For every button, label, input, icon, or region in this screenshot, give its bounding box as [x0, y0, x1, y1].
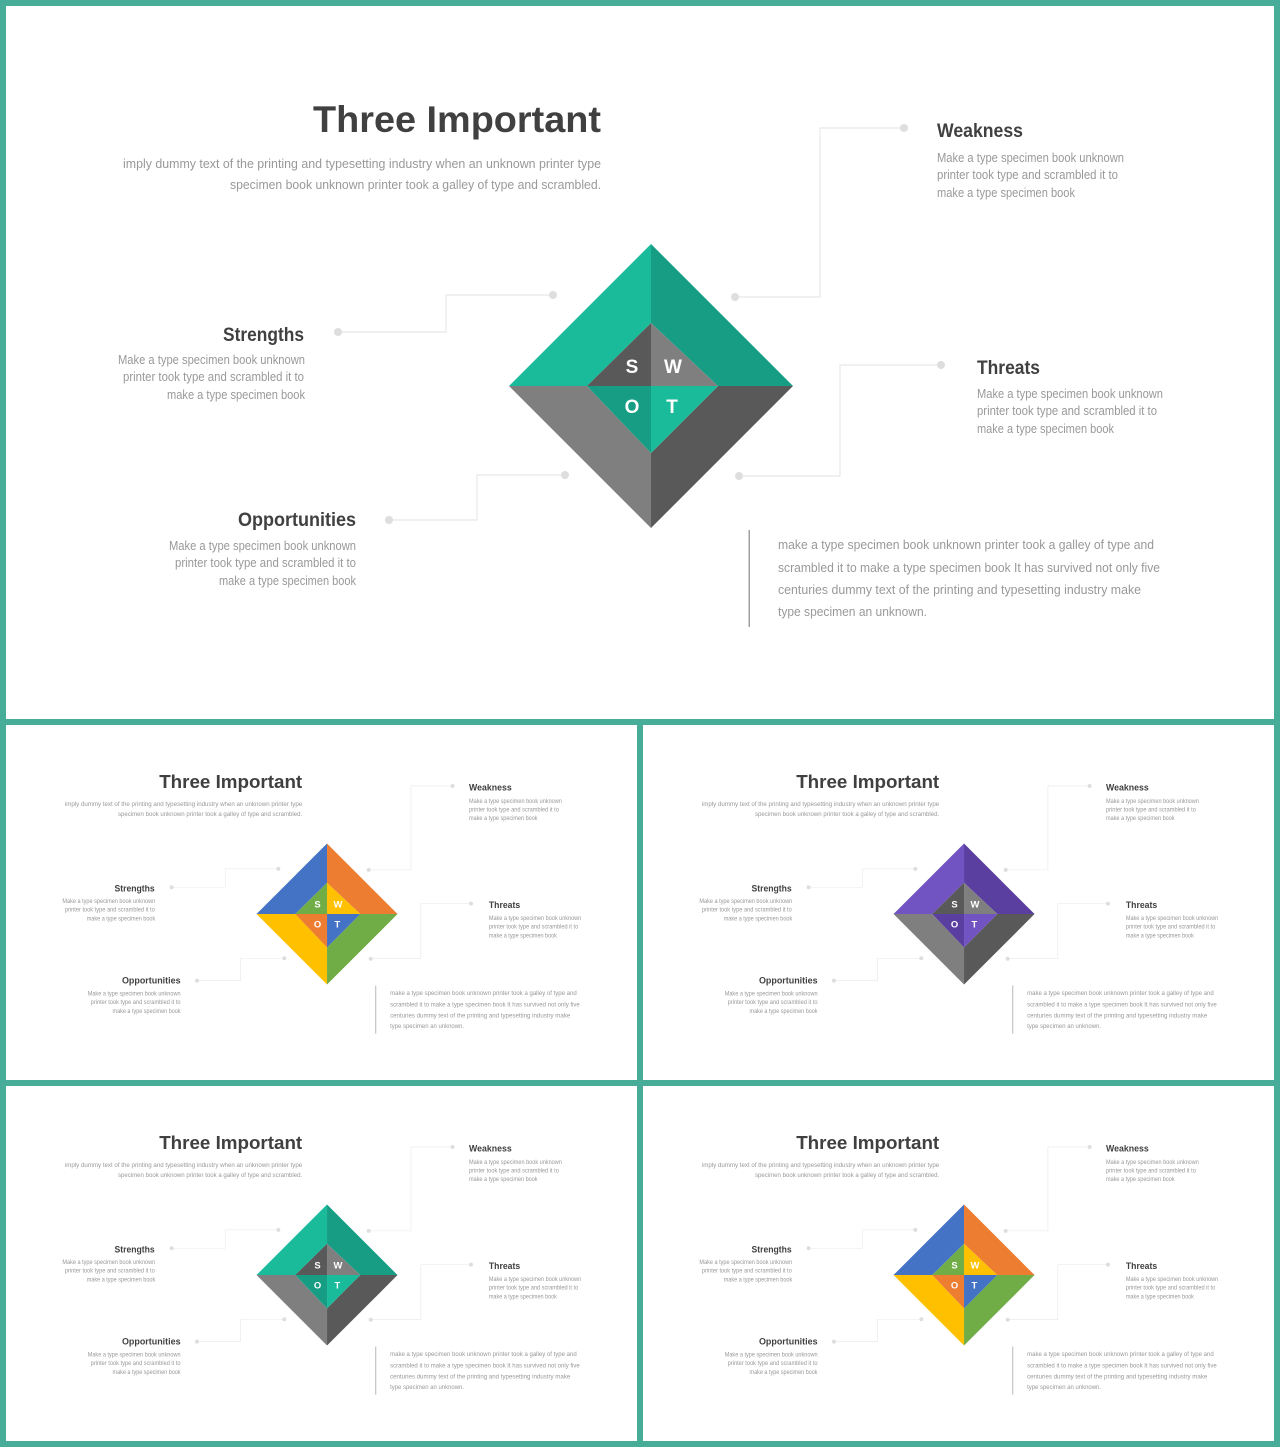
- text block: opportunities: printer took type and scrambled it to: [728, 1360, 818, 1367]
- paragraph with rule: centuries dummy text of the printing and typesetting industry make: [1027, 1373, 1208, 1380]
- text block: opportunities: Make a type specimen book unknown: [169, 539, 356, 553]
- text block: strengths: Make a type specimen book unknown: [699, 1259, 793, 1266]
- text block: opportunities: make a type specimen book: [113, 1369, 181, 1376]
- text block: threats: [489, 899, 582, 939]
- text block: strengths: make a type specimen book: [87, 1277, 156, 1284]
- text block: threats: printer took type and scrambled it to: [1126, 923, 1216, 930]
- text block: opportunities: [88, 975, 181, 1015]
- text block: weakness: Make a type specimen book unknown: [469, 798, 562, 805]
- text block: threats: Threats: [489, 1260, 520, 1271]
- text block: threats: printer took type and scrambled it to: [1126, 1284, 1216, 1291]
- text block: opportunities: Make a type specimen book unknown: [88, 990, 181, 997]
- paragraph with rule: scrambled it to make a type specimen book It has survived not only five: [390, 1362, 580, 1369]
- paragraph with rule: centuries dummy text of the printing and typesetting industry make: [778, 583, 1141, 597]
- intro text: [702, 1162, 940, 1179]
- text block: strengths: [699, 883, 793, 923]
- text block: threats: make a type specimen book: [489, 1293, 558, 1300]
- text block: threats: [1126, 899, 1219, 939]
- text block: weakness: Make a type specimen book unknown: [1106, 798, 1199, 805]
- text block: weakness: printer took type and scrambled it to: [469, 1167, 559, 1174]
- SWOT diamond: S: [314, 1260, 321, 1271]
- connector: threats: [735, 361, 945, 480]
- title: Three Important: [159, 1132, 302, 1153]
- text block: weakness: Weakness: [469, 781, 512, 792]
- paragraph with rule: make a type specimen book unknown printer took a galley of type and: [390, 990, 577, 997]
- text block: threats: Threats: [489, 899, 520, 910]
- text block: weakness: Weakness: [469, 1142, 512, 1153]
- text block: opportunities: Opportunities: [759, 1336, 818, 1347]
- SWOT diamond: S: [626, 357, 638, 378]
- text block: strengths: Strengths: [223, 325, 304, 346]
- SWOT diamond: T: [972, 1279, 978, 1290]
- intro text: imply dummy text of the printing and typesetting industry when an unknown printer type: [65, 801, 303, 808]
- text block: opportunities: [169, 510, 357, 588]
- intro text: [123, 157, 601, 192]
- paragraph with rule: centuries dummy text of the printing and typesetting industry make: [390, 1373, 571, 1380]
- text block: strengths: Strengths: [115, 1244, 155, 1255]
- SWOT diamond: W: [970, 899, 979, 910]
- text block: opportunities: Opportunities: [122, 975, 181, 986]
- text block: strengths: [118, 325, 306, 402]
- text block: opportunities: printer took type and scrambled it to: [175, 556, 356, 570]
- intro text: specimen book unknown printer took a galley of type and scrambled.: [755, 1172, 939, 1179]
- paragraph with rule: make a type specimen book unknown printer took a galley of type and: [1027, 990, 1214, 997]
- SWOT diamond: S: [314, 899, 321, 910]
- text block: threats: Threats: [977, 358, 1040, 379]
- text block: weakness: printer took type and scrambled it to: [1106, 1167, 1196, 1174]
- paragraph with rule: centuries dummy text of the printing and typesetting industry make: [1027, 1012, 1208, 1019]
- text block: weakness: Make a type specimen book unknown: [1106, 1159, 1199, 1166]
- text block: weakness: [937, 121, 1124, 200]
- text block: strengths: printer took type and scrambled it to: [702, 1268, 792, 1275]
- paragraph with rule: scrambled it to make a type specimen book It has survived not only five: [778, 561, 1160, 575]
- paragraph with rule: type specimen an unknown.: [778, 605, 927, 619]
- text block: weakness: [1106, 1142, 1199, 1183]
- intro text: imply dummy text of the printing and typesetting industry when an unknown printer type: [702, 801, 940, 808]
- paragraph with rule: scrambled it to make a type specimen book It has survived not only five: [390, 1001, 580, 1008]
- SWOT diamond: [509, 244, 793, 528]
- SWOT diamond: [894, 844, 1035, 985]
- connectors: [170, 784, 473, 983]
- text block: strengths: Make a type specimen book unknown: [62, 1259, 156, 1266]
- text block: weakness: Make a type specimen book unknown: [937, 151, 1124, 165]
- text block: opportunities: printer took type and scrambled it to: [91, 1360, 181, 1367]
- intro text: [65, 801, 303, 818]
- connector: opportunities: [385, 471, 569, 524]
- intro text: imply dummy text of the printing and typesetting industry when an unknown printer type: [702, 1162, 940, 1169]
- text block: threats: Threats: [1126, 899, 1157, 910]
- SWOT diamond: [894, 1205, 1035, 1346]
- text block: weakness: make a type specimen book: [937, 186, 1076, 200]
- SWOT diamond: O: [314, 918, 321, 929]
- text block: weakness: make a type specimen book: [469, 815, 538, 822]
- paragraph with rule: type specimen an unknown.: [390, 1023, 464, 1030]
- text block: strengths: printer took type and scrambled it to: [65, 907, 155, 914]
- text block: weakness: [469, 781, 562, 822]
- text block: strengths: make a type specimen book: [724, 1277, 793, 1284]
- intro text: [65, 1162, 303, 1179]
- text block: threats: printer took type and scrambled it to: [489, 923, 579, 930]
- title: Three Important: [796, 771, 939, 792]
- text block: opportunities: make a type specimen book: [750, 1369, 818, 1376]
- text block: weakness: make a type specimen book: [1106, 1176, 1175, 1183]
- text block: weakness: Weakness: [1106, 781, 1149, 792]
- text block: threats: Make a type specimen book unknown: [489, 915, 582, 922]
- text block: threats: make a type specimen book: [977, 422, 1115, 436]
- paragraph with rule: type specimen an unknown.: [1027, 1384, 1101, 1391]
- text block: weakness: printer took type and scrambled it to: [1106, 806, 1196, 813]
- text block: strengths: [699, 1244, 793, 1284]
- text block: opportunities: Make a type specimen book unknown: [725, 1351, 818, 1358]
- text block: weakness: make a type specimen book: [469, 1176, 538, 1183]
- SWOT diamond: T: [335, 1279, 341, 1290]
- paragraph with rule: [375, 986, 580, 1034]
- title: Three Important: [159, 771, 302, 792]
- connectors: [807, 784, 1110, 983]
- SWOT diamond: W: [333, 1260, 342, 1271]
- text block: strengths: [62, 1244, 156, 1284]
- text block: strengths: Make a type specimen book unknown: [699, 898, 793, 905]
- SWOT diamond: O: [951, 918, 958, 929]
- title: Three Important: [313, 99, 601, 140]
- text block: strengths: printer took type and scrambled it to: [702, 907, 792, 914]
- SWOT diamond: [257, 1205, 398, 1346]
- connector: strengths: [334, 291, 557, 336]
- text block: strengths: Make a type specimen book unknown: [62, 898, 156, 905]
- text block: strengths: Strengths: [752, 883, 792, 894]
- title: Three Important: [796, 1132, 939, 1153]
- SWOT diamond: S: [951, 899, 958, 910]
- text block: opportunities: Opportunities: [759, 975, 818, 986]
- text block: threats: [977, 358, 1163, 436]
- paragraph with rule: type specimen an unknown.: [390, 1384, 464, 1391]
- text block: threats: make a type specimen book: [1126, 1293, 1195, 1300]
- panel: teal slide bottom left: [6, 1086, 637, 1441]
- text block: weakness: [1106, 781, 1199, 822]
- connector: weakness: [731, 124, 908, 301]
- text block: strengths: make a type specimen book: [87, 916, 156, 923]
- text block: strengths: Strengths: [115, 883, 155, 894]
- intro text: specimen book unknown printer took a galley of type and scrambled.: [230, 178, 601, 192]
- text block: weakness: Weakness: [937, 121, 1023, 142]
- paragraph with rule: centuries dummy text of the printing and typesetting industry make: [390, 1012, 571, 1019]
- text block: opportunities: [725, 975, 818, 1015]
- intro text: specimen book unknown printer took a galley of type and scrambled.: [118, 1172, 302, 1179]
- text block: threats: Make a type specimen book unknown: [489, 1276, 582, 1283]
- text block: opportunities: Make a type specimen book unknown: [88, 1351, 181, 1358]
- text block: strengths: [62, 883, 156, 923]
- text block: opportunities: printer took type and scrambled it to: [728, 999, 818, 1006]
- text block: opportunities: [725, 1336, 818, 1376]
- paragraph with rule: make a type specimen book unknown printer took a galley of type and: [390, 1351, 577, 1358]
- text block: strengths: printer took type and scrambled it to: [65, 1268, 155, 1275]
- text block: weakness: printer took type and scrambled it to: [469, 806, 559, 813]
- SWOT diamond: O: [314, 1279, 321, 1290]
- text block: strengths: printer took type and scrambled it to: [123, 370, 304, 384]
- text block: threats: Make a type specimen book unknown: [977, 387, 1163, 401]
- SWOT diamond: O: [951, 1279, 958, 1290]
- panel: purple slide top right: [643, 725, 1274, 1080]
- paragraph with rule: make a type specimen book unknown printer took a galley of type and: [1027, 1351, 1214, 1358]
- intro text: specimen book unknown printer took a galley of type and scrambled.: [755, 811, 939, 818]
- intro text: [702, 801, 940, 818]
- text block: threats: [1126, 1260, 1219, 1300]
- text block: opportunities: make a type specimen book: [113, 1008, 181, 1015]
- text block: strengths: Make a type specimen book unknown: [118, 353, 305, 367]
- SWOT diamond: T: [666, 397, 678, 418]
- text block: opportunities: make a type specimen book: [750, 1008, 818, 1015]
- text block: weakness: Make a type specimen book unknown: [469, 1159, 562, 1166]
- connectors: [807, 1145, 1110, 1344]
- paragraph with rule: [1012, 986, 1217, 1034]
- panel: multicolor slide top left: [6, 725, 637, 1080]
- panel: main teal and gray slide: [6, 6, 1274, 719]
- panel: multicolor slide bottom right: [643, 1086, 1274, 1441]
- SWOT diamond: T: [335, 918, 341, 929]
- text block: threats: Make a type specimen book unknown: [1126, 915, 1219, 922]
- text block: strengths: make a type specimen book: [724, 916, 793, 923]
- SWOT diamond: T: [972, 918, 978, 929]
- intro text: imply dummy text of the printing and typesetting industry when an unknown printer type: [65, 1162, 303, 1169]
- connectors: [170, 1145, 473, 1344]
- text block: weakness: [469, 1142, 562, 1183]
- paragraph with rule: type specimen an unknown.: [1027, 1023, 1101, 1030]
- paragraph with rule: [375, 1347, 580, 1395]
- text block: weakness: printer took type and scrambled it to: [937, 168, 1118, 182]
- intro text: specimen book unknown printer took a galley of type and scrambled.: [118, 811, 302, 818]
- text block: threats: printer took type and scrambled it to: [977, 404, 1157, 418]
- text block: threats: Make a type specimen book unknown: [1126, 1276, 1219, 1283]
- text block: strengths: make a type specimen book: [167, 388, 306, 402]
- text block: threats: make a type specimen book: [1126, 932, 1195, 939]
- paragraph with rule: scrambled it to make a type specimen book It has survived not only five: [1027, 1362, 1217, 1369]
- SWOT diamond: S: [951, 1260, 958, 1271]
- paragraph with rule: [748, 530, 1160, 627]
- text block: opportunities: Opportunities: [238, 510, 356, 531]
- text block: weakness: make a type specimen book: [1106, 815, 1175, 822]
- SWOT diamond: W: [970, 1260, 979, 1271]
- text block: opportunities: [88, 1336, 181, 1376]
- paragraph with rule: scrambled it to make a type specimen book It has survived not only five: [1027, 1001, 1217, 1008]
- text block: threats: make a type specimen book: [489, 932, 558, 939]
- text block: threats: [489, 1260, 582, 1300]
- text block: threats: Threats: [1126, 1260, 1157, 1271]
- paragraph with rule: make a type specimen book unknown printer took a galley of type and: [778, 538, 1154, 552]
- SWOT diamond: O: [625, 397, 639, 418]
- text block: strengths: Strengths: [752, 1244, 792, 1255]
- SWOT diamond: [257, 844, 398, 985]
- SWOT diamond: W: [664, 357, 682, 378]
- text block: opportunities: printer took type and scrambled it to: [91, 999, 181, 1006]
- text block: weakness: Weakness: [1106, 1142, 1149, 1153]
- SWOT diamond: W: [333, 899, 342, 910]
- text block: opportunities: Make a type specimen book unknown: [725, 990, 818, 997]
- paragraph with rule: [1012, 1347, 1217, 1395]
- intro text: imply dummy text of the printing and typesetting industry when an unknown printer type: [123, 157, 601, 171]
- text block: opportunities: Opportunities: [122, 1336, 181, 1347]
- text block: threats: printer took type and scrambled it to: [489, 1284, 579, 1291]
- text block: opportunities: make a type specimen book: [219, 574, 357, 588]
